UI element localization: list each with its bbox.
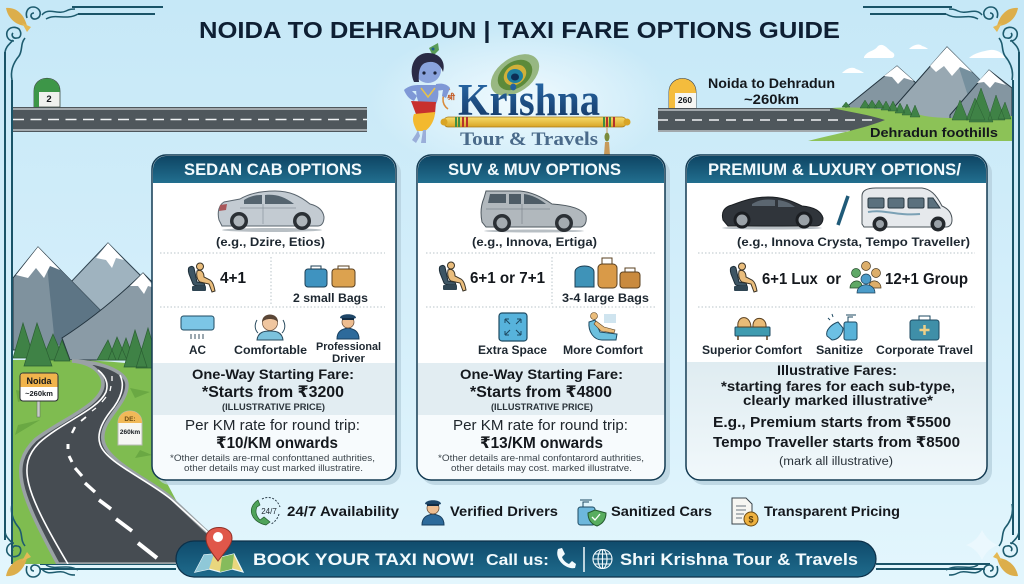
premium and tempo fares: Tempo Traveller starts from ₹8500 (713, 434, 960, 451)
icon: luxury car (722, 197, 823, 230)
illustrative fares note: Illustrative Fares: (777, 362, 897, 378)
icon: tempo traveller (862, 188, 952, 232)
luggage capacity: 2 small Bags (293, 291, 368, 305)
top-right road, milestone and destination scene (658, 45, 1012, 141)
top-left road with milestone (13, 78, 367, 132)
per km rate: Per KM rate for round trip: (185, 418, 360, 434)
per km rate (185, 418, 360, 452)
sparkle (966, 530, 998, 560)
trees (13, 323, 160, 368)
ornament: bottom-right corner (946, 504, 1019, 577)
mountains and clouds (842, 45, 1012, 122)
milestone: DE 260km: DE: (124, 416, 136, 423)
milestone: DE 260km (118, 411, 142, 445)
icon: comfortable person (255, 314, 285, 340)
panel: SUV and MUV options (417, 155, 670, 485)
one-way fare (460, 366, 623, 412)
feature: 24/7 availability: 24/7 Availability (287, 503, 399, 519)
Krishna figure (404, 43, 450, 143)
sign: Noida -260km (20, 373, 58, 417)
illustrative fares note (721, 362, 955, 408)
seating: group: 12+1 Group (885, 271, 968, 288)
icon: superior comfort seats (735, 318, 770, 340)
icon: extra space (499, 313, 527, 341)
label: professional driver: Driver (332, 353, 366, 365)
milestone: 2: 2 (46, 94, 52, 105)
brand name: Krishna (458, 75, 600, 125)
seating capacity: 4+1 (220, 270, 246, 287)
icon: pricing document: $ (748, 514, 754, 524)
label: corporate travel: Corporate Travel (876, 343, 973, 357)
banner brand name: Shri Krishna Tour & Travels (620, 550, 858, 569)
road (658, 108, 900, 132)
per km rate (453, 418, 628, 452)
icon: seat (188, 263, 215, 292)
one-way fare: *Starts from ₹3200 (202, 384, 344, 401)
heading: PREMIUM & LUXURY OPTIONS/ (708, 160, 961, 179)
sign: Noida -260km: ~260km (25, 389, 53, 398)
feature: verified drivers: Verified Drivers (450, 503, 558, 519)
ornament: top-right corner (946, 7, 1019, 80)
one-way fare: One-Way Starting Fare: (460, 366, 623, 382)
feature: sanitized cars: Sanitized Cars (611, 503, 712, 519)
route label (708, 75, 835, 107)
mountains (13, 243, 160, 360)
illustrative fares note: *starting fares for each sub-type, (721, 378, 955, 394)
panel: premium and luxury options (686, 155, 992, 485)
logo: Krishna Tour & Travels (404, 43, 630, 155)
heading: SUV & MUV OPTIONS (448, 160, 621, 179)
fine print: other details may cust marked illustratire. (184, 463, 363, 473)
icon: SUV car (481, 191, 586, 232)
route label: Noida to Dehradun (708, 75, 835, 91)
label: AC: AC (189, 343, 206, 357)
icon: 24/7 phone (251, 497, 280, 525)
ornament: bottom-left corner (5, 504, 78, 577)
icon: map with location pin (195, 528, 243, 572)
one-way fare: (ILLUSTRATIVE PRICE) (491, 402, 593, 412)
milestone: 260: 260 (678, 95, 692, 105)
tassel (604, 127, 610, 155)
one-way fare: *Starts from ₹4800 (470, 384, 612, 401)
fine print: *Other details are-nmal confontarord authrities, (438, 453, 644, 463)
milestone: 2 (34, 78, 60, 107)
premium and tempo fares: (mark all illustrative) (779, 456, 893, 468)
label: professional driver: Professional (316, 341, 381, 353)
trees (842, 88, 1011, 122)
shri mark: श्री (446, 92, 456, 102)
banner call label: Call us: (486, 552, 549, 569)
peacock feather (483, 46, 547, 104)
icon: seat (439, 262, 466, 291)
label: more comfort: More Comfort (563, 343, 643, 357)
fine print: *Other details are-rmal confonttaned authrities, (170, 453, 375, 463)
icon: large bags (575, 258, 640, 288)
destination label: Dehradun foothills (870, 125, 998, 140)
premium and tempo fares (713, 414, 960, 468)
fine print: other details may cost. marked illustratve. (451, 463, 632, 473)
label: professional driver (316, 341, 381, 365)
icon: verified driver (422, 500, 444, 525)
icon: seat (730, 263, 757, 292)
premium and tempo fares: E.g., Premium starts from ₹5500 (713, 414, 951, 431)
label: comfortable: Comfortable (234, 343, 307, 357)
route label: ~260km (744, 91, 799, 107)
grass (13, 360, 176, 564)
icon: bags (305, 266, 355, 287)
heading: SEDAN CAB OPTIONS (184, 160, 362, 179)
icon: more comfort (589, 312, 617, 340)
panel: sedan cab options (152, 155, 401, 485)
icon: sedan car (218, 191, 324, 232)
label: superior comfort: Superior Comfort (702, 343, 802, 357)
icon: group of people (850, 262, 881, 293)
model examples: (e.g., Innova Crysta, Tempo Traveller) (737, 235, 970, 249)
icon: globe (593, 550, 612, 568)
seating capacity: 6+1 or 7+1 (470, 270, 545, 287)
model examples: (e.g., Dzire, Etios) (216, 235, 325, 249)
label: extra space: Extra Space (478, 343, 547, 357)
per km rate: ₹10/KM onwards (216, 435, 338, 452)
tagline: Tour & Travels (460, 129, 598, 150)
one-way fare: (ILLUSTRATIVE PRICE) (222, 402, 325, 412)
icon: 24/7 phone: 24/7 (261, 507, 277, 516)
booking banner (176, 528, 876, 577)
model examples: (e.g., Innova, Ertiga) (472, 235, 597, 249)
icon: driver (337, 314, 359, 339)
per km rate: Per KM rate for round trip: (453, 418, 628, 434)
shri mark (443, 89, 456, 109)
left landscape: mountains, trees and winding road (13, 242, 208, 564)
per km rate: ₹13/KM onwards (480, 435, 603, 452)
banner call to action: BOOK YOUR TAXI NOW! (253, 550, 475, 569)
luggage capacity: 3-4 large Bags (562, 291, 649, 305)
illustrative fares note: clearly marked illustrative* (743, 392, 934, 408)
icon: sanitizer and glove (827, 314, 857, 340)
icon: corporate case (910, 316, 939, 340)
sign: Noida -260km: Noida (26, 376, 52, 386)
meadow (808, 107, 1012, 141)
feature: transparent pricing: Transparent Pricing (764, 503, 900, 519)
fine print (170, 453, 375, 473)
slash separator (838, 196, 848, 225)
flute (440, 117, 630, 127)
milestone: DE 260km: 260km (120, 429, 140, 436)
icon: pricing document (732, 498, 758, 526)
fine print (438, 453, 644, 473)
icon: sanitizer shield (578, 500, 606, 526)
label: sanitize: Sanitize (816, 343, 863, 357)
road surface (19, 359, 208, 564)
title: NOIDA TO DEHRADUN | TAXI FARE OPTIONS GUIDE (199, 17, 840, 43)
road centre dashes (68, 376, 157, 558)
ornament: top-left corner (5, 7, 78, 80)
milestone: 260 (669, 78, 696, 108)
one-way fare: One-Way Starting Fare: (192, 366, 354, 382)
one-way fare (192, 366, 354, 412)
seating: luxury: 6+1 Lux or (762, 271, 841, 288)
icon: AC (181, 316, 214, 339)
feature strip (251, 497, 900, 526)
icon: phone (557, 548, 576, 568)
